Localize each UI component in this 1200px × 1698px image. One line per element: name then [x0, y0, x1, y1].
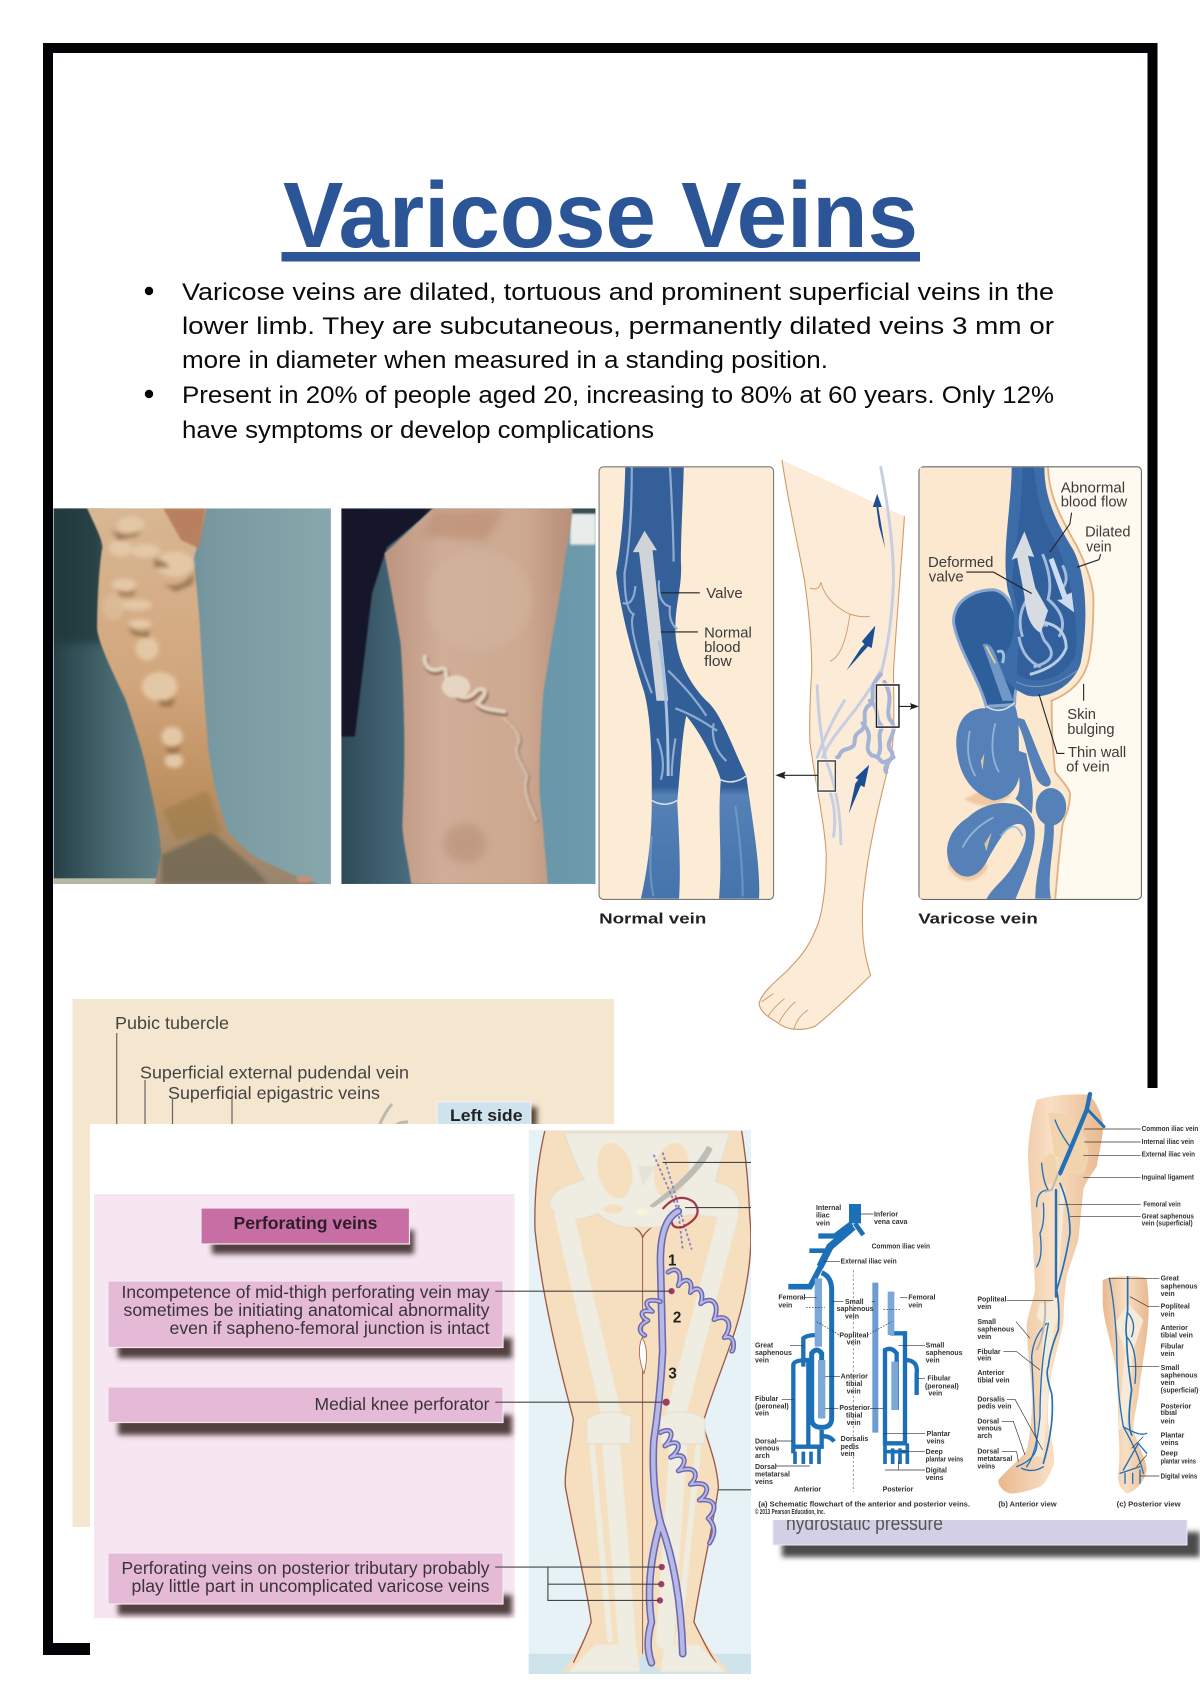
chart labels: Common iliac vein — [872, 1243, 930, 1250]
chart labels: vein — [926, 1357, 940, 1364]
label: abnormal blood flow: blood flow — [1061, 493, 1128, 509]
text block: definition and prevalence bullets: have symptoms or develop complications — [182, 417, 654, 444]
chart labels: Femoral vein — [1143, 1202, 1181, 1209]
chart labels: venous — [977, 1426, 1002, 1433]
chart labels: Digital — [926, 1468, 947, 1475]
chart labels: saphenous — [837, 1306, 874, 1313]
chart labels: Femoral — [908, 1294, 936, 1301]
left side tag: Left side — [450, 1106, 522, 1125]
chart labels: iliac — [816, 1213, 830, 1220]
arrows and zoom boxes — [775, 685, 919, 791]
label: skin bulging: bulging — [1067, 721, 1115, 737]
shadows of coils — [948, 787, 1012, 881]
label: skin bulging: Skin — [1067, 706, 1096, 722]
chart labels: tibial — [846, 1381, 862, 1388]
chart labels: saphenous — [1161, 1372, 1198, 1379]
chart labels: tibial — [846, 1413, 862, 1420]
dilated vein sacs — [954, 590, 1021, 706]
chart labels: (peroneal) — [755, 1403, 789, 1410]
white slide overlay — [90, 1124, 1200, 1698]
heading: perforating veins: Perforating veins — [234, 1213, 378, 1233]
label: dilated vein: Dilated — [1085, 523, 1131, 539]
chart labels: Small — [1161, 1365, 1179, 1372]
callout: posterior tributary perforators: Perforating veins on posterior tributary probably — [122, 1558, 490, 1578]
chart labels: Dorsalis — [841, 1436, 868, 1443]
label: dilated vein — [1085, 523, 1131, 554]
posterior view leg — [1103, 1276, 1149, 1493]
caption: normal vein: Normal vein — [599, 911, 706, 928]
chart labels: Dorsal — [977, 1449, 999, 1456]
panel: normal vein — [599, 467, 774, 899]
chart labels: Anterior — [841, 1373, 868, 1380]
chart labels: Internal — [816, 1205, 841, 1212]
chart labels: Dorsal — [755, 1464, 777, 1471]
anatomy diagram: purple great saphenous vein on legs: 1 — [668, 1252, 677, 1269]
chart labels: © 2013 Pearson Education, Inc. — [755, 1508, 825, 1516]
chart labels: vein — [1161, 1291, 1175, 1298]
label: pubic tubercle: Pubic tubercle — [115, 1013, 229, 1033]
chart labels: Dorsalis — [977, 1396, 1005, 1403]
leg illustration — [759, 460, 904, 1030]
chart labels: Plantar — [1161, 1433, 1185, 1440]
chart labels: (peroneal) — [925, 1383, 959, 1390]
chart labels: saphenous — [755, 1350, 792, 1357]
chart labels: Great saphenous — [1142, 1213, 1194, 1220]
text block: definition and prevalence bullets — [145, 279, 1054, 444]
chart labels: pedis vein — [977, 1404, 1012, 1411]
chart labels: saphenous — [977, 1327, 1014, 1334]
label: abnormal blood flow: Abnormal — [1061, 480, 1125, 496]
chart labels: (a) Schematic flowchart of the anterior and posterior veins. — [758, 1502, 970, 1509]
label: thin wall of vein — [1066, 744, 1126, 775]
chart labels: vein — [778, 1302, 792, 1309]
chart labels: arch — [977, 1433, 992, 1440]
chart labels: (c) Posterior view — [1117, 1502, 1181, 1509]
chart labels: Popliteal — [839, 1332, 868, 1339]
callout: posterior tributary perforators — [108, 1553, 512, 1615]
label: deformed valve: Deformed — [928, 554, 993, 570]
leader lines — [776, 1129, 1159, 1476]
chart labels: vein — [977, 1304, 991, 1311]
chart labels: tibial — [1161, 1410, 1177, 1417]
chart labels: arch — [755, 1453, 770, 1460]
chart labels: vein — [755, 1411, 769, 1418]
text block: definition and prevalence bullets: lower limb. They are subcutaneous, permanently dilated veins 3 mm or — [182, 313, 1054, 340]
photo: tortuous vein behind knee — [341, 508, 595, 884]
chart labels: Plantar — [927, 1431, 951, 1438]
chart labels: metatarsal — [755, 1472, 790, 1479]
panel: superficial veins labels on beige slide — [72, 999, 614, 1527]
label: dilated vein: vein — [1086, 538, 1112, 554]
chart labels: Femoral — [778, 1294, 806, 1301]
chart labels: veins — [926, 1475, 944, 1482]
chart labels: saphenous — [926, 1350, 963, 1357]
chart labels: Deep — [1161, 1451, 1178, 1458]
chart labels: vein — [845, 1314, 859, 1321]
label: normal blood flow: Normal — [704, 624, 752, 641]
chart labels: vein — [977, 1356, 991, 1363]
chart labels: (b) Anterior view — [998, 1502, 1057, 1509]
chart labels: vein — [928, 1391, 942, 1398]
chart labels: Posterior — [883, 1486, 914, 1493]
text block: definition and prevalence bullets: more in diameter when measured in a standing position. — [182, 347, 828, 374]
text block: definition and prevalence bullets: Present in 20% of people aged 20, increasing to 80% at 60 years. Only 12% — [182, 382, 1054, 409]
chart labels: veins — [977, 1463, 995, 1470]
callout: medial knee perforator: Medial knee perforator — [314, 1394, 490, 1414]
chart labels: Fibular — [755, 1396, 779, 1403]
chart labels: vein — [816, 1220, 830, 1227]
chart labels: Popliteal — [977, 1297, 1006, 1304]
chart labels: Fibular — [1161, 1344, 1184, 1351]
chart labels: vein — [755, 1357, 769, 1364]
chart labels — [755, 1126, 1198, 1516]
chart labels: venous — [755, 1446, 780, 1453]
chart labels: vein — [1161, 1312, 1175, 1319]
chart labels: vein — [1161, 1380, 1175, 1387]
callout: mid-thigh perforating vein: sometimes be initiating anatomical abnormality — [124, 1300, 490, 1320]
callout: posterior tributary perforators: play little part in uncomplicated varicose veins — [132, 1576, 490, 1596]
chart labels: Inguinal ligament — [1142, 1174, 1195, 1181]
chart labels: Dorsal — [755, 1438, 777, 1445]
bones — [550, 1133, 739, 1672]
anterior view leg — [998, 1094, 1104, 1493]
chart labels: vein — [841, 1451, 855, 1458]
callout: mid-thigh perforating vein: Incompetence of mid-thigh perforating vein may — [122, 1282, 490, 1302]
chart: veins of the lower limb — [751, 1088, 1200, 1520]
chart labels: vein — [847, 1340, 861, 1347]
panel: perforating veins — [94, 1194, 514, 1618]
chart labels: vein — [847, 1388, 861, 1395]
callout: mid-thigh perforating vein: even if sapheno-femoral junction is intact — [170, 1318, 490, 1338]
callout: mid-thigh perforating vein — [108, 1281, 512, 1358]
chart labels: Anterior — [977, 1370, 1005, 1377]
chart labels: Great — [755, 1343, 774, 1350]
chart labels: tibial vein — [1161, 1332, 1193, 1339]
caption: varicose vein: Varicose vein — [918, 911, 1038, 928]
chart labels: vein — [1161, 1351, 1175, 1358]
chart labels: vein — [977, 1334, 991, 1341]
chart labels: vein — [1161, 1418, 1175, 1425]
label: normal blood flow: flow — [704, 653, 733, 669]
chart labels: Small — [845, 1299, 864, 1306]
chart labels: Inferior — [874, 1212, 898, 1219]
chart labels: veins — [755, 1479, 773, 1486]
chart labels: vein (superficial) — [1142, 1221, 1193, 1228]
chart labels: plantar veins — [926, 1456, 963, 1463]
chart labels: veins — [927, 1438, 945, 1445]
chart labels: Deep — [926, 1449, 943, 1456]
anatomy diagram: purple great saphenous vein on legs — [495, 1130, 751, 1674]
anatomy diagram: purple great saphenous vein on legs: 3 — [668, 1365, 677, 1382]
heading: perforating veins — [201, 1208, 414, 1254]
label: normal blood flow: blood — [704, 639, 740, 655]
chart labels: Posterior — [1161, 1403, 1192, 1410]
chart labels: tibial vein — [977, 1377, 1010, 1384]
chart labels: Popliteal — [1161, 1303, 1190, 1310]
label: abnormal blood flow — [1061, 480, 1128, 509]
label: skin bulging — [1067, 706, 1115, 737]
label: superficial external pudendal vein: Superficial external pudendal vein — [140, 1062, 409, 1082]
chart labels: Posterior — [839, 1405, 870, 1412]
chart labels: Fibular — [977, 1349, 1001, 1356]
chart labels: External iliac vein — [841, 1258, 897, 1265]
title: Varicose Veins — [283, 163, 918, 267]
label: thin wall of vein: Thin wall — [1068, 744, 1126, 760]
purple veins — [639, 1211, 734, 1663]
chart labels: Internal iliac vein — [1142, 1139, 1194, 1146]
chart labels: metatarsal — [977, 1456, 1012, 1463]
chart labels: (superficial) — [1161, 1388, 1198, 1395]
flowchart: anterior and posterior veins — [788, 1204, 917, 1492]
chart labels: saphenous — [1161, 1284, 1198, 1291]
chart labels: Anterior — [794, 1486, 821, 1493]
label: deformed valve — [928, 554, 993, 585]
panel: varicose vein — [919, 467, 1141, 899]
chart labels: Small — [977, 1319, 996, 1326]
label: thin wall of vein: of vein — [1066, 758, 1110, 775]
label: valve: Valve — [706, 585, 743, 601]
anatomy diagram: purple great saphenous vein on legs: 2 — [673, 1310, 681, 1327]
label: superficial epigastric veins: Superficial epigastric veins — [168, 1083, 380, 1103]
left side tag — [437, 1102, 537, 1127]
callout: hydrostatic pressure bar: hydrostatic pressure — [786, 1513, 943, 1535]
chart labels: pedis — [841, 1444, 859, 1451]
label: deformed valve: valve — [929, 568, 964, 585]
chart labels: Anterior — [1161, 1325, 1188, 1332]
chart labels: Great — [1161, 1276, 1180, 1283]
photo: bulging veins on lower leg — [54, 503, 331, 887]
chart labels: veins — [1161, 1440, 1179, 1447]
anatomy diagram: leg with normal and varicose vein panels — [599, 460, 1141, 1030]
label: normal blood flow — [704, 624, 752, 669]
chart labels: vein — [847, 1420, 861, 1427]
chart labels: Fibular — [927, 1376, 951, 1383]
callout: medial knee perforator — [108, 1387, 512, 1435]
chart labels: vein — [908, 1302, 922, 1309]
lower coil — [947, 705, 1066, 899]
chart labels: External iliac vein — [1142, 1152, 1195, 1159]
text block: definition and prevalence bullets: Varicose veins are dilated, tortuous and prominent superficial veins in the — [182, 279, 1054, 306]
chart labels: Dorsal — [977, 1418, 999, 1425]
chart labels: vena cava — [874, 1219, 908, 1226]
chart labels: Small — [926, 1343, 944, 1350]
callout: hydrostatic pressure bar — [773, 1500, 1200, 1557]
